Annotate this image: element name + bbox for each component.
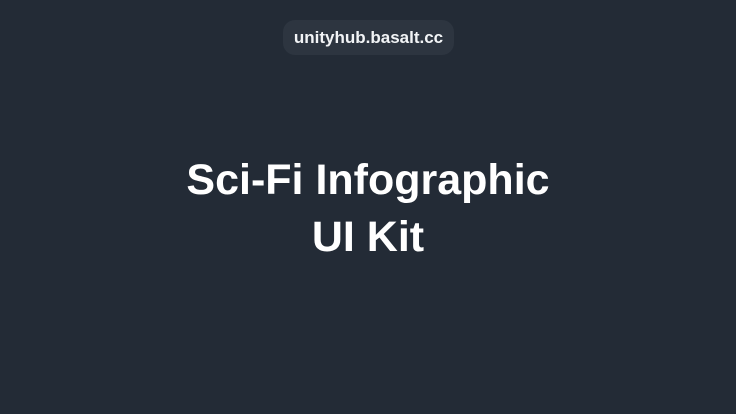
title bbox=[186, 156, 550, 261]
title: Sci-Fi Infographic bbox=[186, 156, 550, 204]
pill: site name: unityhub.basalt.cc bbox=[294, 28, 443, 47]
title: UI Kit bbox=[312, 213, 424, 261]
pill: site name bbox=[283, 20, 454, 55]
